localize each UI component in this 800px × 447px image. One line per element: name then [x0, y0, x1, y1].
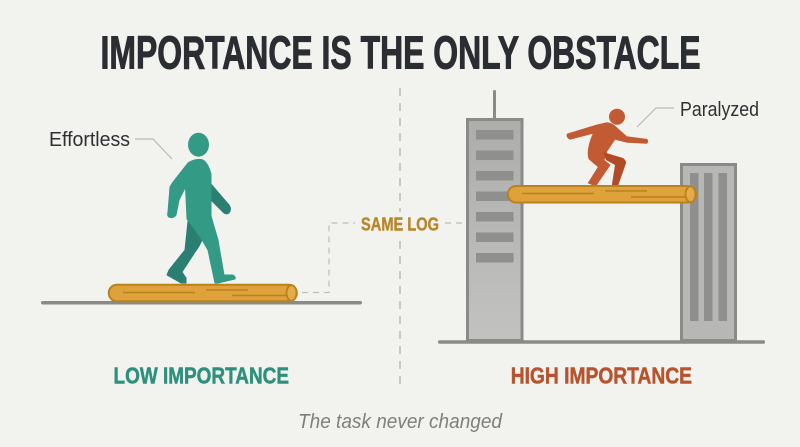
icon: log on ground: [109, 285, 297, 301]
icon: left tower: [468, 90, 522, 340]
panel: low importance: [41, 128, 362, 388]
callout: effortless: Effortless: [49, 128, 130, 151]
label: low importance: LOW IMPORTANCE: [114, 362, 289, 388]
callout: paralyzed: [637, 98, 759, 127]
callout: effortless: [49, 128, 172, 159]
icon: frozen person: [567, 109, 648, 186]
icon: log between towers: [508, 186, 696, 202]
ground line right: [438, 340, 765, 344]
icon: right tower: [682, 164, 736, 340]
icon: walking person: [167, 133, 235, 283]
callout: paralyzed: Paralyzed: [680, 98, 759, 121]
footer caption: The task never changed: [298, 411, 503, 433]
panel: high importance: [438, 90, 765, 388]
ground line left: [41, 301, 362, 304]
label: high importance: HIGH IMPORTANCE: [511, 362, 692, 388]
callout: same log: [302, 214, 464, 292]
callout: same log: SAME LOG: [361, 214, 439, 234]
